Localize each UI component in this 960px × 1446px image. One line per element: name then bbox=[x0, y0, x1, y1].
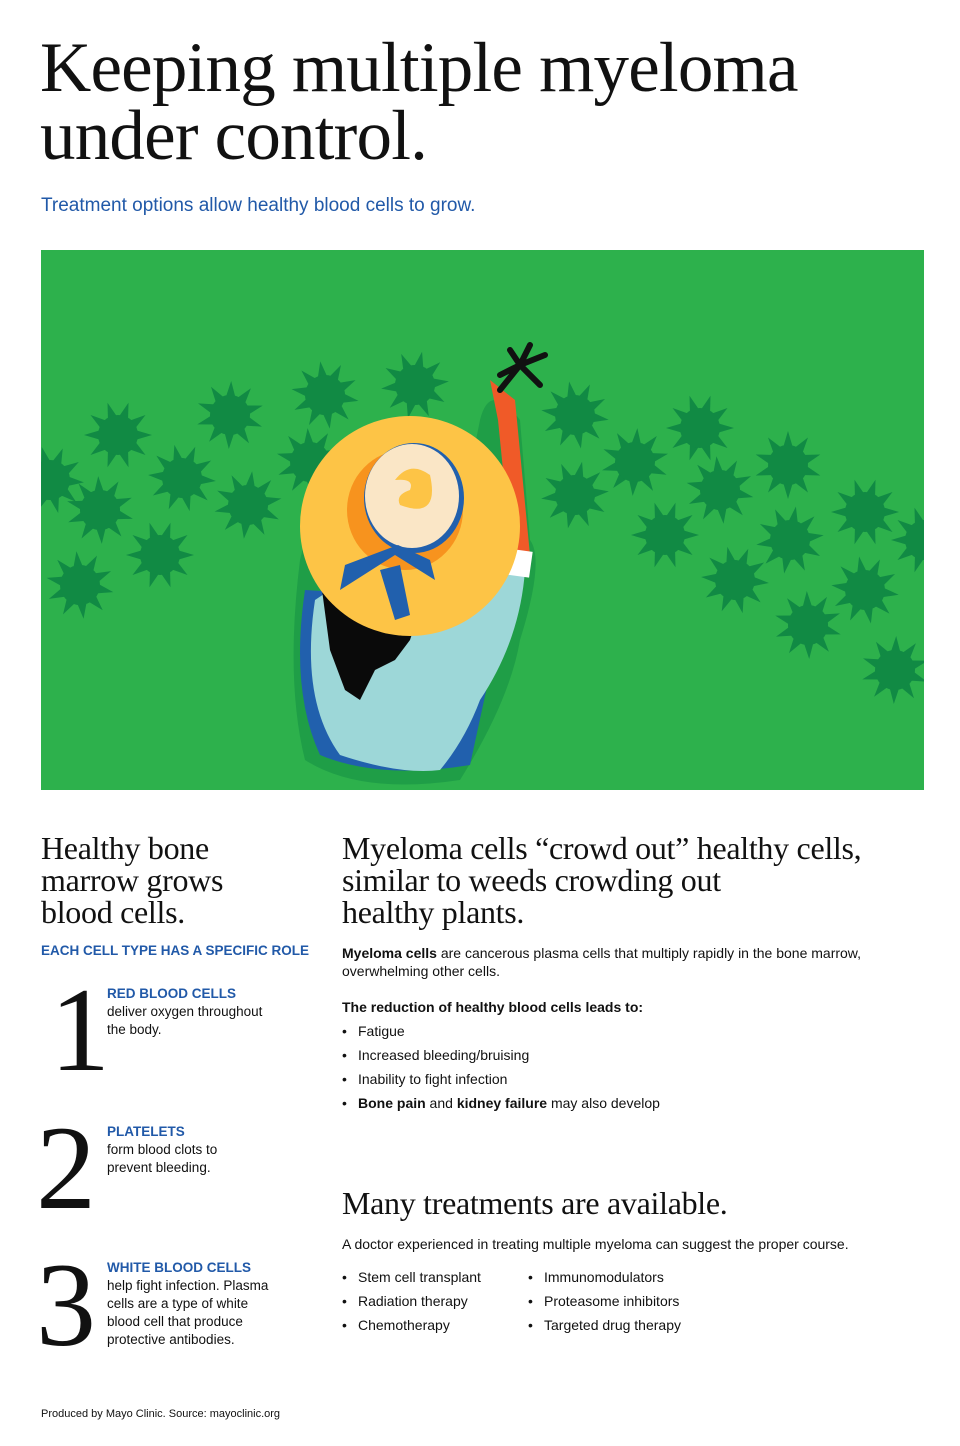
treatments list: Stem cell transplant bbox=[358, 1269, 481, 1285]
treatments list: Radiation therapy bbox=[358, 1293, 468, 1309]
reduction list: Fatigue bbox=[358, 1023, 405, 1039]
left heading: Healthy bone bbox=[41, 830, 209, 866]
left heading: blood cells. bbox=[41, 894, 185, 930]
item 1 bbox=[50, 963, 262, 1096]
right heading: similar to weeds crowding out bbox=[342, 862, 721, 898]
item 3: help fight infection. Plasma cells are a type of white bbox=[107, 1278, 268, 1311]
item 3: 3 bbox=[36, 1238, 96, 1371]
reduction list: Bone pain and kidney failure may also develop bbox=[358, 1095, 660, 1111]
treatments list bbox=[342, 1269, 681, 1333]
item 2: PLATELETS bbox=[107, 1124, 185, 1139]
left heading bbox=[41, 830, 223, 930]
title: under control. bbox=[40, 97, 427, 175]
treatments text: A doctor experienced in treating multiple myeloma can suggest the proper course. bbox=[342, 1236, 849, 1252]
item 2: form blood clots to bbox=[107, 1142, 217, 1157]
item 1: 1 bbox=[50, 963, 110, 1096]
left heading: marrow grows bbox=[41, 862, 223, 898]
illustration bbox=[41, 250, 924, 790]
item 1: deliver oxygen throughout the body. bbox=[107, 1004, 262, 1037]
reduction list bbox=[342, 999, 660, 1111]
footer: Produced by Mayo Clinic. Source: mayoclinic.org bbox=[41, 1408, 280, 1420]
treatments heading: Many treatments are available. bbox=[342, 1185, 728, 1221]
reduction list: Inability to fight infection bbox=[358, 1071, 507, 1087]
treatments list: Proteasome inhibitors bbox=[544, 1293, 679, 1309]
item 3 bbox=[36, 1238, 268, 1371]
treatments list: Chemotherapy bbox=[358, 1317, 450, 1333]
right heading: healthy plants. bbox=[342, 894, 524, 930]
item 1: RED BLOOD CELLS bbox=[107, 986, 236, 1001]
subtitle: Treatment options allow healthy blood cells to grow. bbox=[41, 195, 475, 216]
item 2: prevent bleeding. bbox=[107, 1160, 211, 1175]
item 2: 2 bbox=[36, 1101, 96, 1234]
weeds bbox=[3, 340, 959, 712]
treatments list: Targeted drug therapy bbox=[544, 1317, 681, 1333]
item 3: WHITE BLOOD CELLS bbox=[107, 1260, 251, 1275]
title bbox=[40, 29, 798, 175]
reduction list: Increased bleeding/bruising bbox=[358, 1047, 529, 1063]
title: Keeping multiple myeloma bbox=[40, 29, 798, 107]
treatments list: Immunomodulators bbox=[544, 1269, 664, 1285]
left subheading: EACH CELL TYPE HAS A SPECIFIC ROLE bbox=[41, 943, 309, 958]
right heading: Myeloma cells “crowd out” healthy cells, bbox=[342, 830, 861, 866]
myeloma text: Myeloma cells are cancerous plasma cells that multiply rapidly in the bone marrow, overwhelming other cells. bbox=[342, 945, 861, 979]
item 2 bbox=[36, 1101, 217, 1234]
right heading bbox=[342, 830, 861, 930]
reduction list: The reduction of healthy blood cells leads to: bbox=[342, 999, 643, 1015]
figure: woman with hat bbox=[294, 345, 545, 784]
item 3: blood cell that produce protective antibodies. bbox=[107, 1314, 243, 1347]
